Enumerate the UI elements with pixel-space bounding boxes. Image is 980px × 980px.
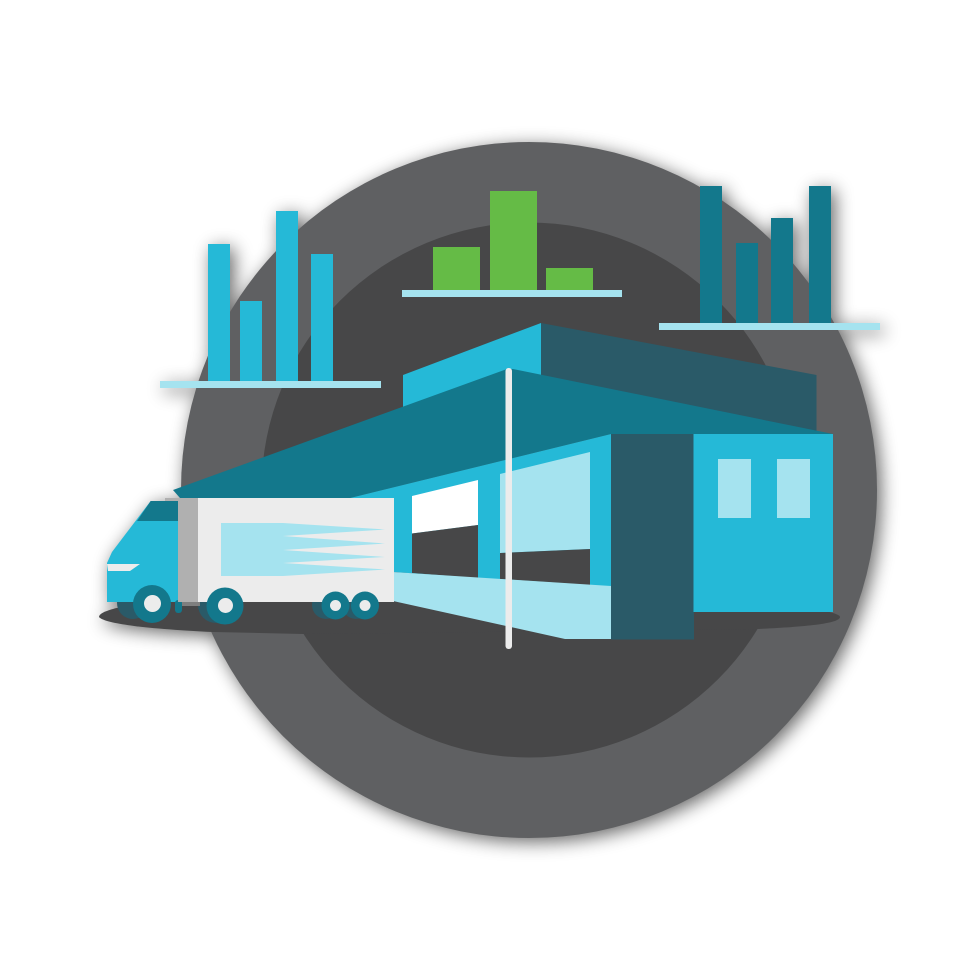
front wall — [350, 434, 611, 587]
background circles — [181, 142, 877, 838]
loading bay right — [500, 452, 590, 585]
bar chart: left blue — [160, 211, 381, 388]
headlight — [107, 564, 140, 571]
soft drop shadow — [103, 146, 884, 842]
side window left — [718, 459, 751, 518]
main roof — [173, 369, 833, 498]
bar chart: centre green — [402, 191, 622, 297]
ground shadow — [99, 600, 840, 634]
cargo connector — [178, 498, 198, 602]
cab top strip — [165, 498, 179, 502]
wheel shadows — [117, 587, 370, 623]
dark column — [611, 434, 694, 640]
pole — [506, 368, 512, 649]
upper roof — [403, 323, 816, 432]
bar chart: right teal — [659, 186, 880, 330]
side window right — [777, 459, 810, 518]
delivery truck — [107, 498, 394, 624]
cargo graphic — [221, 523, 385, 576]
cab window — [137, 501, 178, 521]
cargo box — [198, 498, 394, 602]
mud flap — [175, 600, 182, 613]
front wheel — [133, 585, 171, 623]
middle wheel — [206, 588, 244, 624]
cab — [107, 501, 178, 602]
rear wheel 2 — [351, 592, 379, 620]
loading bay left — [412, 480, 478, 578]
warehouse building — [173, 323, 833, 649]
loading platform — [393, 572, 611, 639]
side wall — [694, 434, 833, 612]
chassis strip — [178, 602, 200, 606]
rear wheel 1 — [322, 592, 350, 620]
